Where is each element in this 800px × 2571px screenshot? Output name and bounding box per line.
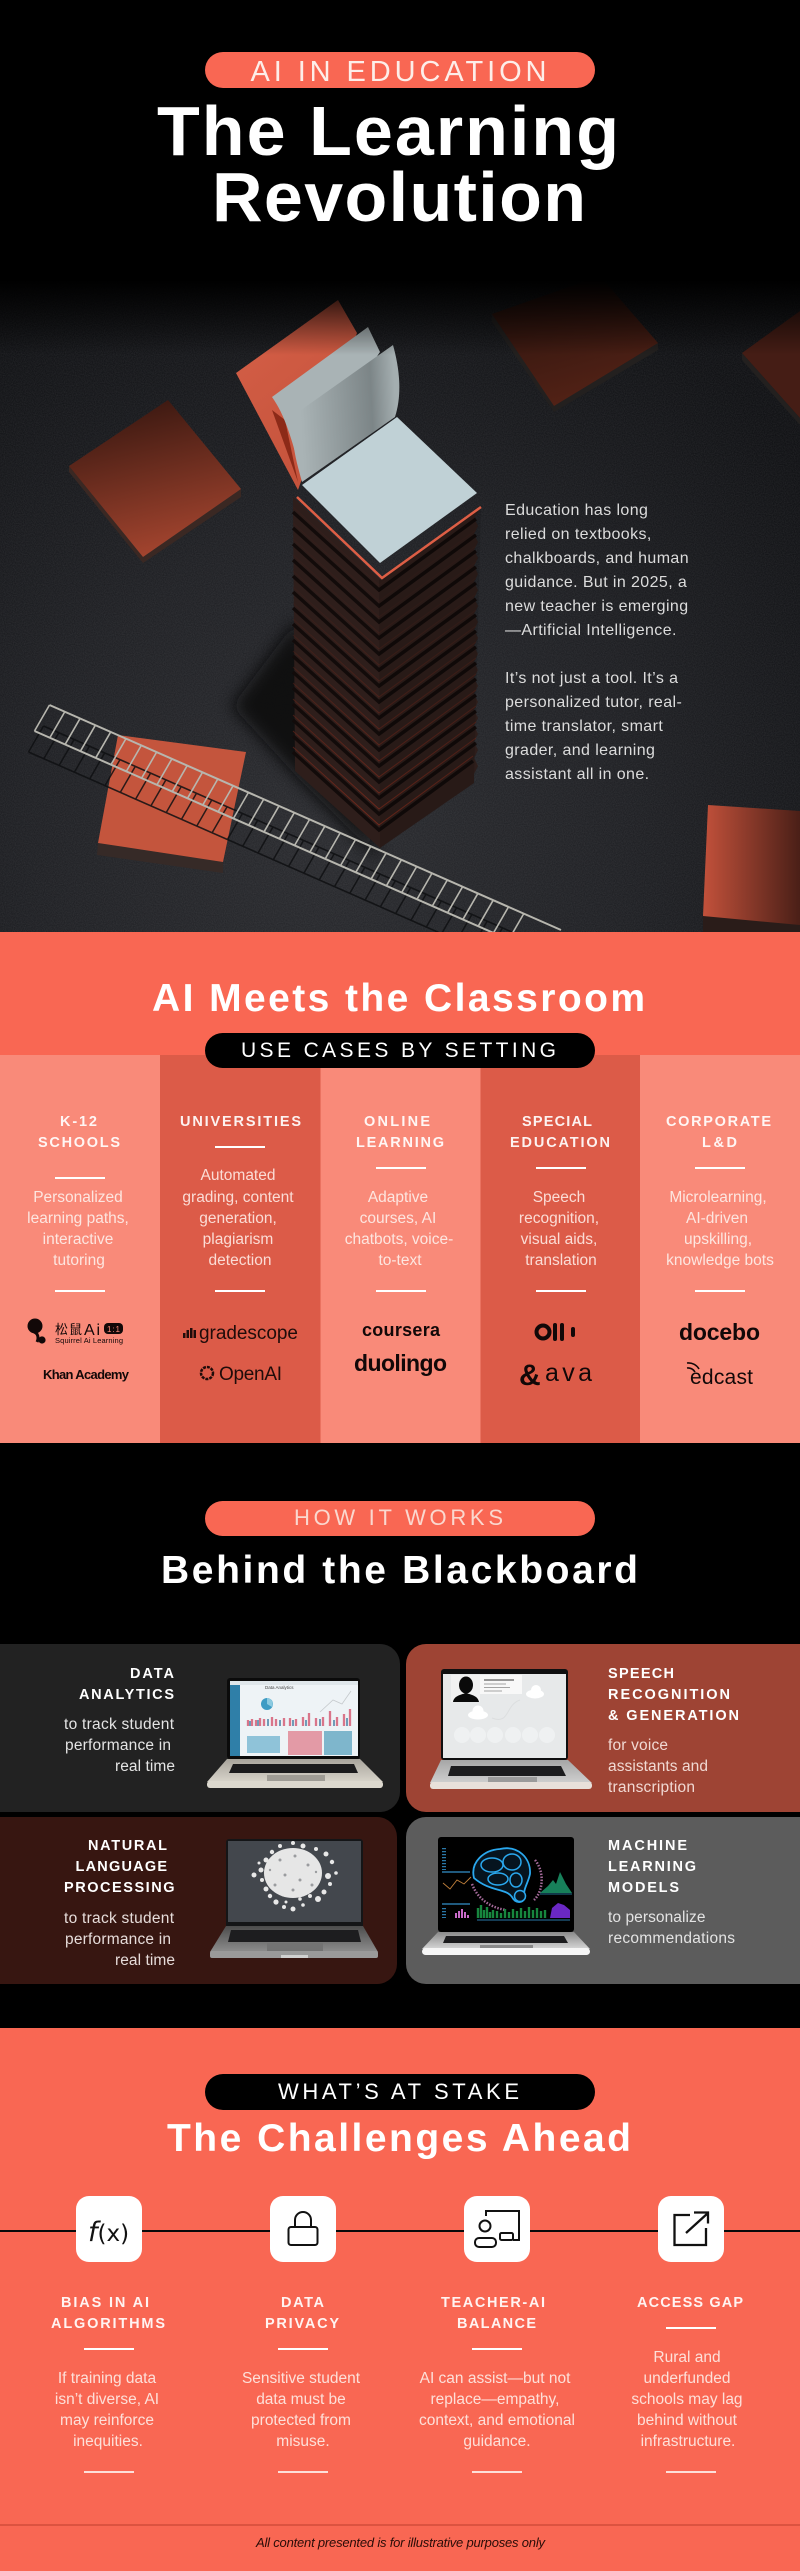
hero intro text: It’s not just a tool. It’s a <box>505 670 678 687</box>
main title: Revolution <box>212 158 586 236</box>
tower shadow <box>232 620 380 860</box>
book: lower left <box>97 735 246 873</box>
column: corporate L&D <box>666 1114 774 1389</box>
icon: lock <box>270 2196 336 2262</box>
card: natural language processing: to track student <box>64 1910 175 1927</box>
orange top cover edge <box>297 497 481 578</box>
hero pill: AI in Education <box>205 52 595 88</box>
pill: how it works: HOW IT WORKS <box>294 1505 503 1530</box>
challenge: teacher-AI balance: AI can assist—but not <box>420 2370 571 2387</box>
column: K-12 schools: learning paths, <box>27 1210 129 1227</box>
column: special education: Speech <box>533 1189 585 1206</box>
logo: coursera: coursera <box>362 1320 441 1340</box>
laptop: language cloud <box>210 1839 378 1958</box>
challenge: access gap: infrastructure. <box>641 2433 735 2450</box>
card: machine learning models: LEARNING <box>608 1859 696 1875</box>
column: K-12 schools <box>27 1114 130 1382</box>
book: left floor <box>69 400 241 563</box>
column: online learning: chatbots, voice- <box>345 1231 453 1248</box>
challenge: data privacy: PRIVACY <box>265 2316 339 2332</box>
column: universities: grading, content <box>182 1189 294 1206</box>
column: online learning <box>345 1114 453 1376</box>
challenge: teacher-AI balance: BALANCE <box>457 2316 536 2332</box>
card: machine learning models: MACHINE <box>608 1838 687 1854</box>
card: natural language processing: PROCESSING <box>64 1880 174 1896</box>
column: online learning: LEARNING <box>356 1135 444 1151</box>
hero intro text: guidance. But in 2025, a <box>505 574 687 591</box>
icon: f(x) <box>76 2196 142 2262</box>
challenge: bias in AI algorithms: If training data <box>58 2370 156 2387</box>
pill: how it works <box>205 1501 595 1536</box>
challenge: bias in AI algorithms <box>51 2196 165 2473</box>
column: online learning: to-text <box>378 1252 422 1269</box>
card: data analytics: ANALYTICS <box>79 1687 174 1703</box>
hero intro text: assistant all in one. <box>505 766 649 783</box>
challenge: bias in AI algorithms: may reinforce <box>60 2412 154 2429</box>
hero illustration: book tower on dark floor <box>0 276 800 967</box>
open back cover <box>236 300 357 490</box>
column: universities: Automated <box>201 1167 275 1184</box>
card: speech recognition: transcription <box>608 1779 695 1796</box>
pill: what's at stake <box>205 2074 595 2110</box>
card: data analytics: to track student <box>64 1716 175 1733</box>
column: K-12 schools: SCHOOLS <box>38 1135 120 1151</box>
challenge: teacher-AI balance <box>419 2196 575 2473</box>
card: speech recognition: & GENERATION <box>608 1708 739 1724</box>
challenge: teacher-AI balance: TEACHER-AI <box>441 2295 545 2311</box>
column: corporate L&D: upskilling, <box>684 1231 752 1248</box>
footer note: All content presented is for illustrative purposes only <box>255 2535 546 2550</box>
icon: external link <box>658 2196 724 2262</box>
hero intro text: time translator, smart <box>505 718 663 735</box>
column: K-12 schools: tutoring <box>53 1252 105 1269</box>
challenge: data privacy: protected from <box>251 2412 351 2429</box>
laptop: analytics dashboard <box>207 1678 383 1788</box>
hero intro text: grader, and learning <box>505 742 655 759</box>
panel: AI Meets the Classroom <box>0 932 800 1443</box>
logo: docebo: docebo <box>679 1319 760 1345</box>
card: data analytics: real time <box>115 1758 175 1775</box>
hero intro text <box>505 502 689 783</box>
challenge: bias in AI algorithms: BIAS IN AI <box>61 2295 149 2311</box>
challenge: data privacy: Sensitive student <box>242 2370 361 2387</box>
column: K-12 schools: Personalized <box>33 1189 123 1206</box>
column: corporate L&D: L&D <box>702 1135 737 1151</box>
challenge: access gap: Rural and <box>653 2349 721 2366</box>
challenge: access gap <box>631 2196 743 2473</box>
logo: edcast: edcast <box>690 1366 753 1389</box>
use-case column backgrounds <box>0 1055 800 1443</box>
card: machine learning models: to personalize <box>608 1909 706 1926</box>
hero intro text: —Artificial Intelligence. <box>505 622 677 639</box>
hero intro text: personalized tutor, real- <box>505 694 682 711</box>
logo: Squirrel Ai Learning: 松鼠 <box>55 1322 82 1337</box>
book: top right <box>492 297 658 411</box>
challenge: data privacy: DATA <box>281 2295 325 2311</box>
challenge: access gap: schools may lag <box>631 2391 743 2408</box>
laptop: analytics dashboard: Data Analytics <box>265 1685 294 1690</box>
card: natural language processing: real time <box>115 1952 175 1969</box>
column: corporate L&D: AI-driven <box>686 1210 748 1227</box>
icon: f(x): f(x) <box>88 2217 129 2248</box>
column: corporate L&D: knowledge bots <box>666 1252 774 1269</box>
ladder <box>34 705 561 940</box>
card: speech recognition: assistants and <box>608 1758 708 1775</box>
challenge: data privacy: misuse. <box>276 2433 330 2450</box>
main title <box>157 92 619 236</box>
logo: Squirrel Ai Learning: 1:1 <box>107 1325 121 1334</box>
card: machine learning models: MODELS <box>608 1880 679 1896</box>
challenge: data privacy <box>242 2196 361 2473</box>
pill: use cases by setting <box>205 1033 595 1068</box>
hero intro text: Education has long <box>505 502 648 519</box>
column: universities <box>180 1114 301 1385</box>
book: far right <box>742 311 800 425</box>
column: special education: translation <box>525 1252 597 1269</box>
column: online learning: courses, AI <box>360 1210 436 1227</box>
challenge: teacher-AI balance: replace—empathy, <box>431 2391 559 2408</box>
column: corporate L&D: CORPORATE <box>666 1114 771 1130</box>
logo: Ava: & <box>519 1359 541 1392</box>
top open page <box>302 417 477 563</box>
column: K-12 schools: K-12 <box>60 1114 97 1130</box>
column: K-12 schools: interactive <box>43 1231 113 1248</box>
column: special education: EDUCATION <box>510 1135 610 1151</box>
rear page <box>272 327 380 450</box>
challenge: data privacy: data must be <box>256 2391 346 2408</box>
card: natural language processing: performance in <box>65 1931 171 1948</box>
column: universities: plagiarism <box>203 1231 273 1248</box>
card: data analytics: DATA <box>130 1666 175 1682</box>
card: speech recognition <box>406 1644 800 1812</box>
challenge: bias in AI algorithms: inequities. <box>73 2433 143 2450</box>
challenge: access gap: ACCESS GAP <box>637 2295 743 2311</box>
section heading: Behind the Blackboard: Behind the Blackboard <box>161 1549 638 1592</box>
column: universities: detection <box>209 1252 271 1269</box>
challenge: access gap: behind without <box>637 2412 738 2429</box>
logo: duolingo: duolingo <box>354 1350 447 1376</box>
curling page <box>293 345 399 482</box>
pill: what's at stake: WHAT’S AT STAKE <box>278 2079 519 2104</box>
timeline line <box>0 2230 800 2232</box>
section heading: The Challenges Ahead: The Challenges Ahead <box>167 2117 631 2160</box>
card: data analytics <box>0 1644 400 1812</box>
hero intro text: chalkboards, and human <box>505 550 689 567</box>
laptop: brain visualisation <box>422 1837 590 1955</box>
column: special education: recognition, <box>519 1210 599 1227</box>
hero intro text: new teacher is emerging <box>505 598 689 615</box>
icon: teacher at board <box>464 2196 530 2262</box>
logo: Squirrel Ai Learning: Ai <box>84 1322 100 1339</box>
column: universities: generation, <box>199 1210 277 1227</box>
panel: the challenges ahead <box>0 2028 800 2571</box>
hero pill: AI in Education: AI IN EDUCATION <box>250 56 546 88</box>
logo: Squirrel Ai Learning <box>28 1318 123 1345</box>
logo: Squirrel Ai Learning: Squirrel Ai Learning <box>55 1336 123 1345</box>
ladder shadow <box>28 726 512 932</box>
card: natural language processing: NATURAL <box>88 1838 167 1854</box>
column: special education <box>510 1114 610 1392</box>
challenge: bias in AI algorithms: ALGORITHMS <box>51 2316 165 2332</box>
column: special education: visual aids, <box>521 1231 597 1248</box>
column: special education: SPECIAL <box>522 1114 592 1130</box>
card: speech recognition: RECOGNITION <box>608 1687 730 1703</box>
card: data analytics: performance in <box>65 1737 171 1754</box>
book tower body <box>293 497 481 848</box>
card: natural language processing <box>0 1817 397 1984</box>
card: speech recognition: for voice <box>608 1737 668 1754</box>
logo: Otter <box>536 1323 575 1341</box>
footer divider <box>0 2524 800 2526</box>
column: universities: UNIVERSITIES <box>180 1114 301 1130</box>
column: online learning: ONLINE <box>364 1114 430 1130</box>
column: online learning: Adaptive <box>368 1189 428 1206</box>
logo: Ava <box>519 1359 592 1392</box>
card: natural language processing: LANGUAGE <box>76 1859 167 1875</box>
section heading: AI Meets the Classroom: AI Meets the Classroom <box>152 977 645 1020</box>
card: machine learning models: recommendations <box>608 1930 735 1947</box>
challenge: bias in AI algorithms: isn’t diverse, AI <box>55 2391 159 2408</box>
logo: Khan Academy: Khan Academy <box>43 1367 130 1382</box>
card: speech recognition: SPEECH <box>608 1666 674 1682</box>
card: machine learning models <box>406 1817 800 1984</box>
book: lower right <box>703 805 800 932</box>
laptop: speech UI <box>430 1669 592 1789</box>
pill: use cases by setting: USE CASES BY SETTING <box>241 1039 556 1062</box>
column: corporate L&D: Microlearning, <box>669 1189 767 1206</box>
challenge: teacher-AI balance: context, and emotional <box>419 2412 575 2429</box>
logo: OpenAI: OpenAI <box>219 1364 282 1385</box>
logo: Ava: ava <box>545 1359 592 1387</box>
challenge: teacher-AI balance: guidance. <box>463 2433 531 2450</box>
logo: gradescope: gradescope <box>199 1323 298 1344</box>
challenge: access gap: underfunded <box>643 2370 731 2387</box>
main title: The Learning <box>157 92 619 170</box>
hero intro text: relied on textbooks, <box>505 526 652 543</box>
